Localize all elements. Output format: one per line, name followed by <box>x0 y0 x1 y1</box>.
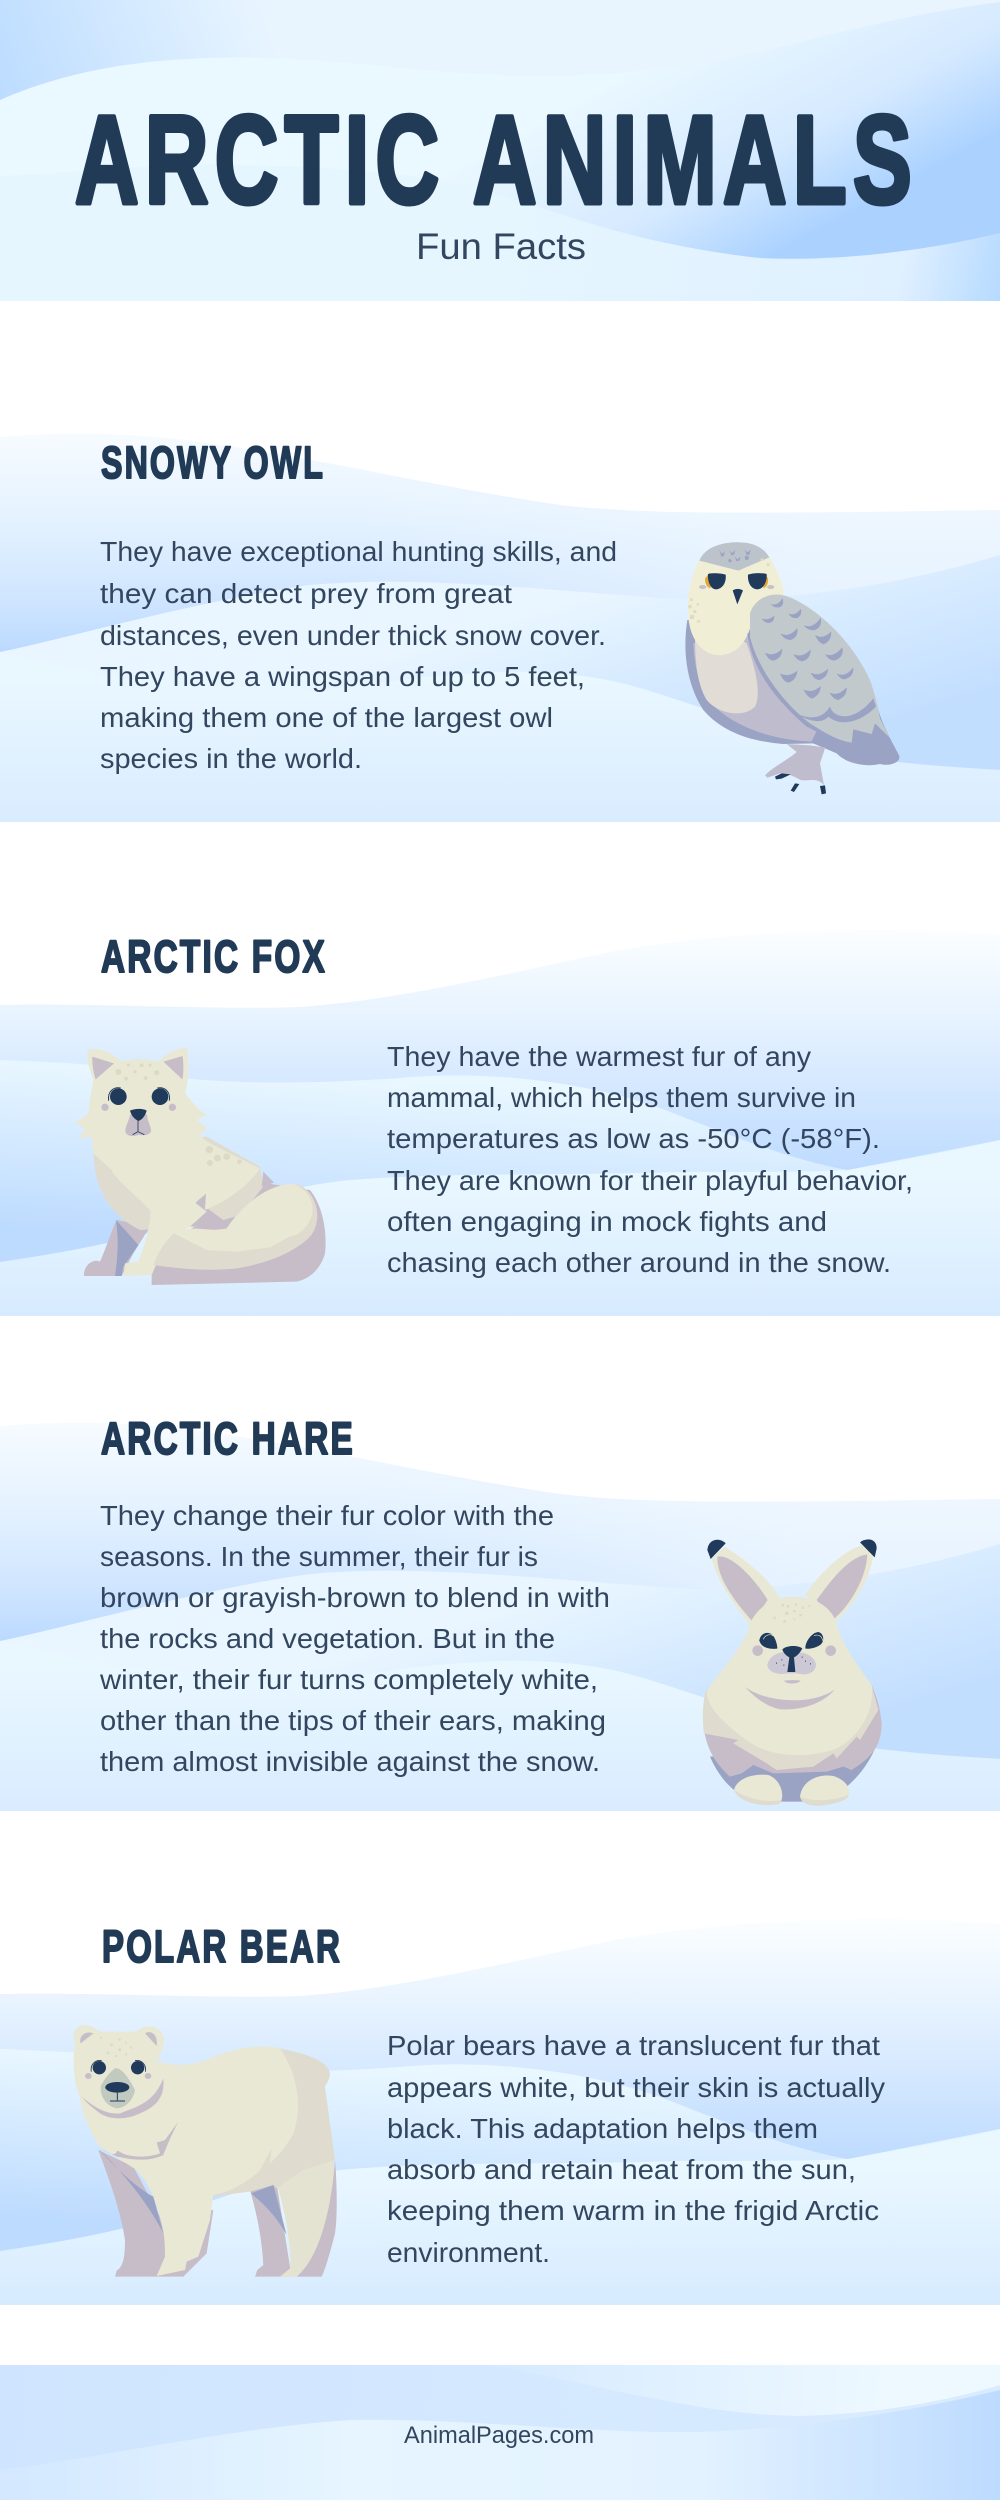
text block: arctic fox facts: often engaging in mock fights and <box>387 1206 827 1237</box>
icon: arctic fox <box>75 1048 326 1285</box>
panel: snowy owl <box>0 434 1000 822</box>
text block: arctic hare facts: other than the tips of their ears, making <box>100 1705 606 1736</box>
fox panel wave background <box>0 930 1000 1316</box>
heading: arctic fox: ARCTIC FOX <box>101 931 327 982</box>
text block: polar bear facts: appears white, but their skin is actually <box>387 2072 885 2103</box>
text block: arctic hare facts: the rocks and vegetation. But in the <box>100 1623 555 1654</box>
text block: arctic fox facts: chasing each other around in the snow. <box>387 1247 891 1278</box>
heading: arctic hare: ARCTIC HARE <box>101 1413 355 1464</box>
text block: snowy owl facts: They have exceptional hunting skills, and <box>100 536 617 567</box>
footer text: AnimalPages.com <box>404 2422 594 2449</box>
icon: snowy owl <box>685 542 899 794</box>
subtitle: Fun Facts <box>416 226 586 267</box>
text block: snowy owl facts <box>100 536 617 774</box>
text block: arctic hare facts: seasons. In the summer, their fur is <box>100 1541 538 1572</box>
text block: arctic fox facts: mammal, which helps them survive in <box>387 1082 856 1113</box>
hare panel wave background <box>0 1423 1000 1811</box>
text block: polar bear facts: Polar bears have a translucent fur that <box>387 2030 880 2061</box>
heading: snowy owl: SNOWY OWL <box>101 437 325 488</box>
panel: header <box>0 0 1000 301</box>
icon: arctic hare <box>703 1539 882 1806</box>
text block: arctic fox facts: They have the warmest fur of any <box>387 1041 811 1072</box>
text block: arctic fox facts <box>387 1041 913 1278</box>
text block: polar bear facts: environment. <box>387 2237 550 2268</box>
icon: polar bear <box>73 2025 337 2277</box>
footer wave background <box>0 2365 1000 2500</box>
text block: polar bear facts: keeping them warm in the frigid Arctic <box>387 2195 879 2226</box>
heading: polar bear: POLAR BEAR <box>102 1921 342 1972</box>
text block: snowy owl facts: distances, even under thick snow cover. <box>100 620 606 651</box>
text block: arctic hare facts: They change their fur color with the <box>100 1500 554 1531</box>
text block: snowy owl facts: species in the world. <box>100 743 362 774</box>
text block: arctic hare facts: winter, their fur turns completely white, <box>99 1664 598 1695</box>
header wave background <box>0 0 1000 301</box>
panel: footer <box>0 2365 1000 2500</box>
text block: polar bear facts <box>387 2030 885 2268</box>
text block: arctic hare facts: brown or grayish-brown to blend in with <box>100 1582 610 1613</box>
panel: polar bear <box>0 1919 1000 2305</box>
text block: snowy owl facts: making them one of the largest owl <box>100 702 553 733</box>
panel: arctic fox <box>0 930 1000 1316</box>
panel: arctic hare <box>0 1413 1000 1811</box>
text block: arctic hare facts: them almost invisible against the snow. <box>100 1746 600 1777</box>
text block: polar bear facts: black. This adaptation helps them <box>387 2113 818 2144</box>
text block: arctic hare facts <box>99 1500 610 1777</box>
owl panel wave background <box>0 434 1000 822</box>
text block: polar bear facts: absorb and retain heat from the sun, <box>387 2154 856 2185</box>
text block: snowy owl facts: they can detect prey from great <box>100 578 512 609</box>
text block: snowy owl facts: They have a wingspan of up to 5 feet, <box>100 661 585 692</box>
text block: arctic fox facts: They are known for their playful behavior, <box>387 1165 913 1196</box>
bear panel wave background <box>0 1919 1000 2305</box>
text block: arctic fox facts: temperatures as low as -50°C (-58°F). <box>387 1123 880 1154</box>
